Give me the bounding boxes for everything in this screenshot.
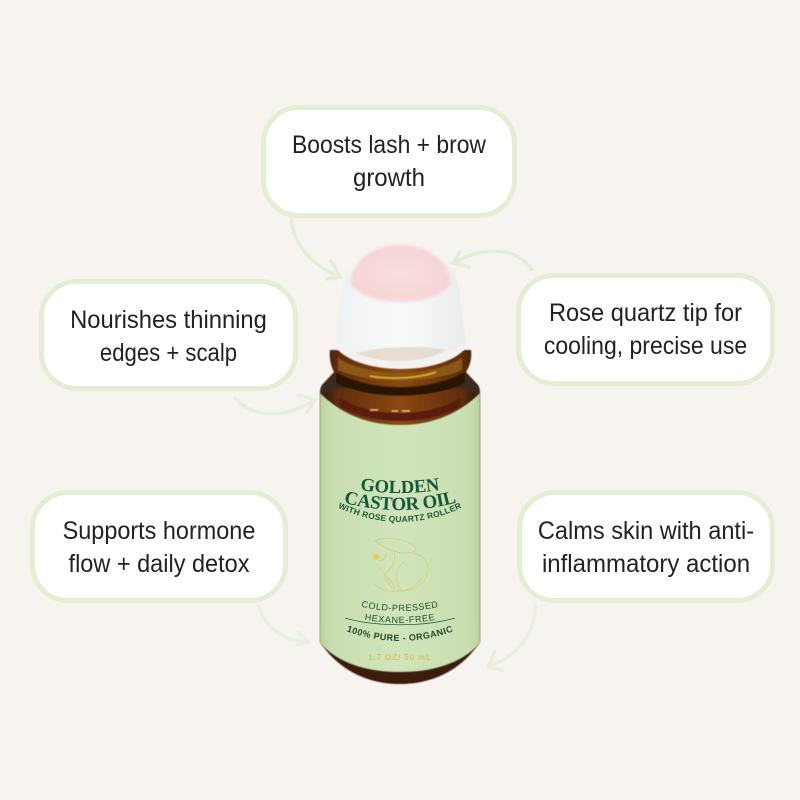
callout: anti-inflammatory: Calms skin with anti- [538,517,754,545]
label claims: COLD-PRESSED [362,601,438,611]
callout: lash and brow: growth [353,164,425,192]
label heading: GOLDEN [362,478,438,494]
label heading: CASTOR OIL [346,492,456,510]
callout: hormone flow: flow + daily detox [69,550,249,578]
label claims [346,601,452,641]
rose quartz ball [350,245,451,302]
callout: rose quartz tip: cooling, precise use [544,332,747,360]
callout: edges and scalp: Nourishes thinning [70,306,267,334]
callout: anti-inflammatory [517,490,775,603]
callout: edges and scalp [39,279,298,391]
callout: rose quartz tip: Rose quartz tip for [549,299,742,327]
amber glass body [320,350,480,684]
arrow: calms card to bottle [488,604,535,670]
callout: rose quartz tip [516,273,775,386]
callout: edges and scalp: edges + scalp [100,339,237,367]
arrow: hormone card to bottle [259,607,308,645]
roller cap [336,262,466,369]
callout: anti-inflammatory: inflammatory action [542,550,750,578]
arrow: quartz card to roller [453,251,532,270]
callout: hormone flow: Supports hormone [63,517,255,545]
label claims: HEXANE-FREE [365,614,434,623]
label size text: 1.7 OZ/ 50 mL [368,653,432,662]
label claims: 100% PURE - ORGANIC [346,626,452,641]
arrow: lash card to roller [291,219,340,279]
callout: lash and brow [261,105,517,218]
icon: woman line drawing [373,538,428,591]
green label [320,393,480,672]
callout: hormone flow [30,490,288,603]
label heading [346,478,456,510]
label subheading: WITH ROSE QUARTZ ROLLER [339,502,462,524]
bottle [319,244,481,685]
callout: lash and brow: Boosts lash + brow [292,131,486,159]
arrow: scalp card to bottle [235,395,315,414]
